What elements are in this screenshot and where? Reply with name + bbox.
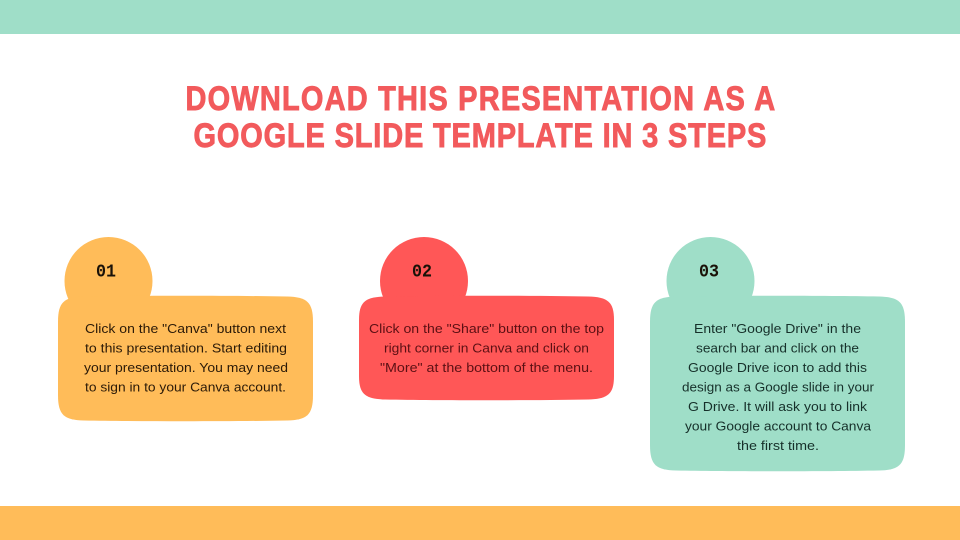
text: step 1 bbox=[84, 321, 288, 394]
text: step 2: "More" at the bottom of the menu. bbox=[380, 360, 593, 375]
text: step 1: your presentation. You may need bbox=[84, 360, 288, 375]
title: GOOGLE SLIDE TEMPLATE IN 3 STEPS bbox=[194, 116, 766, 155]
text: step 1: to sign in to your Canva account. bbox=[85, 380, 286, 394]
title bbox=[186, 79, 775, 155]
text: step 1: to this presentation. Start editing bbox=[85, 340, 287, 356]
card: step 3 bbox=[650, 296, 905, 471]
card: step 2 bbox=[359, 296, 614, 400]
number: 02: 02 bbox=[412, 262, 432, 282]
top bar bbox=[0, 0, 960, 34]
panel: step 2 bbox=[359, 237, 614, 400]
bottom bar bbox=[0, 506, 960, 540]
number: 01: 01 bbox=[96, 262, 116, 282]
title: DOWNLOAD THIS PRESENTATION AS A bbox=[186, 79, 775, 118]
text: step 2: right corner in Canva and click on bbox=[384, 340, 589, 356]
text: step 3: Google Drive icon to add this bbox=[688, 360, 868, 375]
text: step 3: the first time. bbox=[737, 438, 819, 453]
text: step 2: Click on the "Share" button on the top bbox=[369, 321, 604, 336]
badge circle: step 2 bbox=[380, 237, 468, 325]
text: step 3 bbox=[682, 321, 875, 453]
text: step 3: design as a Google slide in your bbox=[682, 380, 875, 394]
badge circle: step 3 bbox=[666, 237, 754, 325]
card: step 1 bbox=[58, 296, 313, 421]
panel: step 3 bbox=[650, 237, 905, 471]
text: step 3: your Google account to Canva bbox=[685, 418, 872, 434]
panel: step 1 bbox=[58, 237, 313, 421]
text: step 3: G Drive. It will ask you to link bbox=[688, 399, 868, 414]
text: step 3: Enter "Google Drive" in the bbox=[694, 321, 861, 336]
text: step 1: Click on the "Canva" button next bbox=[85, 321, 286, 336]
badge circle: step 1 bbox=[64, 237, 152, 325]
text: step 2 bbox=[369, 321, 604, 375]
number: 03: 03 bbox=[699, 262, 719, 282]
text: step 3: search bar and click on the bbox=[696, 340, 859, 356]
